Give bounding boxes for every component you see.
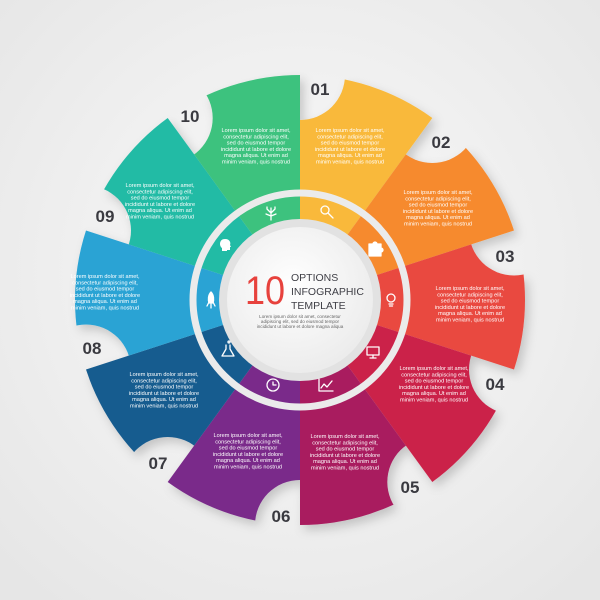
text blocks: consectetur adipiscing elit, [317, 134, 383, 140]
segment 6 [168, 366, 300, 528]
segment 10 [194, 75, 308, 234]
text blocks: sed do eiusmod tempor [135, 385, 193, 391]
text blocks: magna aliqua. Ut enim ad [406, 215, 470, 221]
text blocks: incididunt ut labore et dolore [403, 209, 473, 215]
text blocks: consectetur adipiscing elit, [223, 134, 289, 140]
text blocks: Lorem ipsum dolor sit amet, [70, 274, 140, 280]
text blocks: Lorem ipsum dolor sit amet, [399, 366, 469, 372]
text blocks: incididunt ut labore et dolore [435, 305, 505, 311]
segment 4 [348, 325, 501, 488]
text blocks: incididunt ut labore et dolore [125, 202, 195, 208]
text blocks: sed do eiusmod tempor [441, 299, 499, 305]
icon: tree [266, 207, 276, 220]
segment 2 [348, 148, 520, 275]
text blocks: incididunt ut labore et dolore [70, 293, 140, 299]
center title: OPTIONS [291, 272, 338, 284]
icon: monitor [367, 347, 379, 358]
segment 8 [75, 230, 223, 356]
text blocks: minim veniam, quis nostrud [311, 466, 379, 472]
segment 9 [104, 118, 252, 275]
text blocks: Lorem ipsum dolor sit amet, [221, 128, 291, 134]
text blocks: incididunt ut labore et dolore [315, 147, 385, 153]
numbers: 08 [83, 339, 101, 358]
numbers: 06 [272, 507, 290, 526]
text blocks: minim veniam, quis nostrud [436, 318, 504, 324]
icon: head [220, 239, 231, 251]
segment 3 [377, 244, 533, 376]
text blocks: sed do eiusmod tempor [227, 141, 285, 147]
text blocks: magna aliqua. Ut enim ad [402, 391, 466, 397]
numbers: 04 [486, 375, 505, 394]
text blocks: sed do eiusmod tempor [316, 447, 374, 453]
icon: flask [222, 341, 234, 356]
icon: bulb [387, 294, 395, 306]
text blocks: magna aliqua. Ut enim ad [128, 208, 192, 214]
text blocks: incididunt ut labore et dolore [399, 385, 469, 391]
numbers: 07 [149, 454, 167, 473]
text blocks: magna aliqua. Ut enim ad [438, 311, 502, 317]
numbers: 02 [432, 133, 450, 152]
text blocks: magna aliqua. Ut enim ad [132, 397, 196, 403]
text blocks: Lorem ipsum dolor sit amet, [403, 190, 473, 196]
text blocks: sed do eiusmod tempor [409, 203, 467, 209]
text blocks: minim veniam, quis nostrud [404, 222, 472, 228]
text blocks: consectetur adipiscing elit, [401, 372, 467, 378]
text blocks: minim veniam, quis nostrud [214, 464, 282, 470]
segment 7 [86, 325, 252, 458]
center title: 10 [245, 269, 285, 313]
numbers: 05 [401, 478, 419, 497]
icon: magnifier [321, 206, 333, 218]
text blocks: Lorem ipsum dolor sit amet, [213, 433, 283, 439]
icon: chart [319, 379, 333, 391]
text blocks: consectetur adipiscing elit, [437, 292, 503, 298]
text blocks: sed do eiusmod tempor [405, 379, 463, 385]
text blocks: consectetur adipiscing elit, [312, 440, 378, 446]
segment 1 [300, 80, 438, 234]
numbers: 09 [96, 207, 114, 226]
text blocks: consectetur adipiscing elit, [405, 196, 471, 202]
center title [245, 269, 364, 313]
text blocks: sed do eiusmod tempor [76, 287, 134, 293]
center text: incididunt ut labore et dolore magna aliqua [257, 324, 344, 329]
icon: rocket [207, 292, 215, 308]
text blocks [70, 128, 505, 472]
text blocks: Lorem ipsum dolor sit amet, [435, 286, 505, 292]
numbers: 01 [311, 80, 329, 99]
text blocks: sed do eiusmod tempor [131, 196, 189, 202]
icon: clock [267, 379, 279, 391]
center text [257, 314, 344, 329]
center circle [227, 227, 373, 373]
text blocks: minim veniam, quis nostrud [316, 160, 384, 166]
numbers: 03 [496, 247, 514, 266]
icons [207, 206, 395, 391]
wheel: ten segments [75, 75, 525, 525]
text blocks: magna aliqua. Ut enim ad [313, 459, 377, 465]
text blocks: Lorem ipsum dolor sit amet, [125, 183, 195, 189]
center text: adipiscing elit, sed do eiusmod tempor [261, 319, 340, 324]
text blocks: consectetur adipiscing elit, [131, 378, 197, 384]
icon: puzzle [369, 242, 383, 256]
text blocks: incididunt ut labore et dolore [221, 147, 291, 153]
center title: INFOGRAPHIC [291, 286, 364, 298]
text blocks: consectetur adipiscing elit, [215, 439, 281, 445]
segment 5 [300, 366, 410, 534]
text blocks: Lorem ipsum dolor sit amet, [315, 128, 385, 134]
center title: TEMPLATE [291, 300, 346, 312]
text blocks: minim veniam, quis nostrud [71, 306, 139, 312]
text blocks: minim veniam, quis nostrud [130, 404, 198, 410]
text blocks: consectetur adipiscing elit, [127, 189, 193, 195]
text blocks: magna aliqua. Ut enim ad [73, 299, 137, 305]
text blocks: incididunt ut labore et dolore [310, 453, 380, 459]
text blocks: Lorem ipsum dolor sit amet, [310, 434, 380, 440]
text blocks: consectetur adipiscing elit, [72, 280, 138, 286]
numbers [83, 80, 514, 526]
text blocks: minim veniam, quis nostrud [126, 214, 194, 220]
numbers: 10 [181, 107, 199, 126]
text blocks: incididunt ut labore et dolore [213, 452, 283, 458]
text blocks: incididunt ut labore et dolore [129, 391, 199, 397]
center text: Lorem ipsum dolor sit amet, consectetur [259, 314, 341, 319]
text blocks: minim veniam, quis nostrud [400, 398, 468, 404]
text blocks: minim veniam, quis nostrud [222, 160, 290, 166]
text blocks: sed do eiusmod tempor [219, 446, 277, 452]
text blocks: sed do eiusmod tempor [321, 141, 379, 147]
text blocks: magna aliqua. Ut enim ad [318, 153, 382, 159]
text blocks: Lorem ipsum dolor sit amet, [129, 372, 199, 378]
text blocks: magna aliqua. Ut enim ad [216, 458, 280, 464]
text blocks: magna aliqua. Ut enim ad [224, 153, 288, 159]
